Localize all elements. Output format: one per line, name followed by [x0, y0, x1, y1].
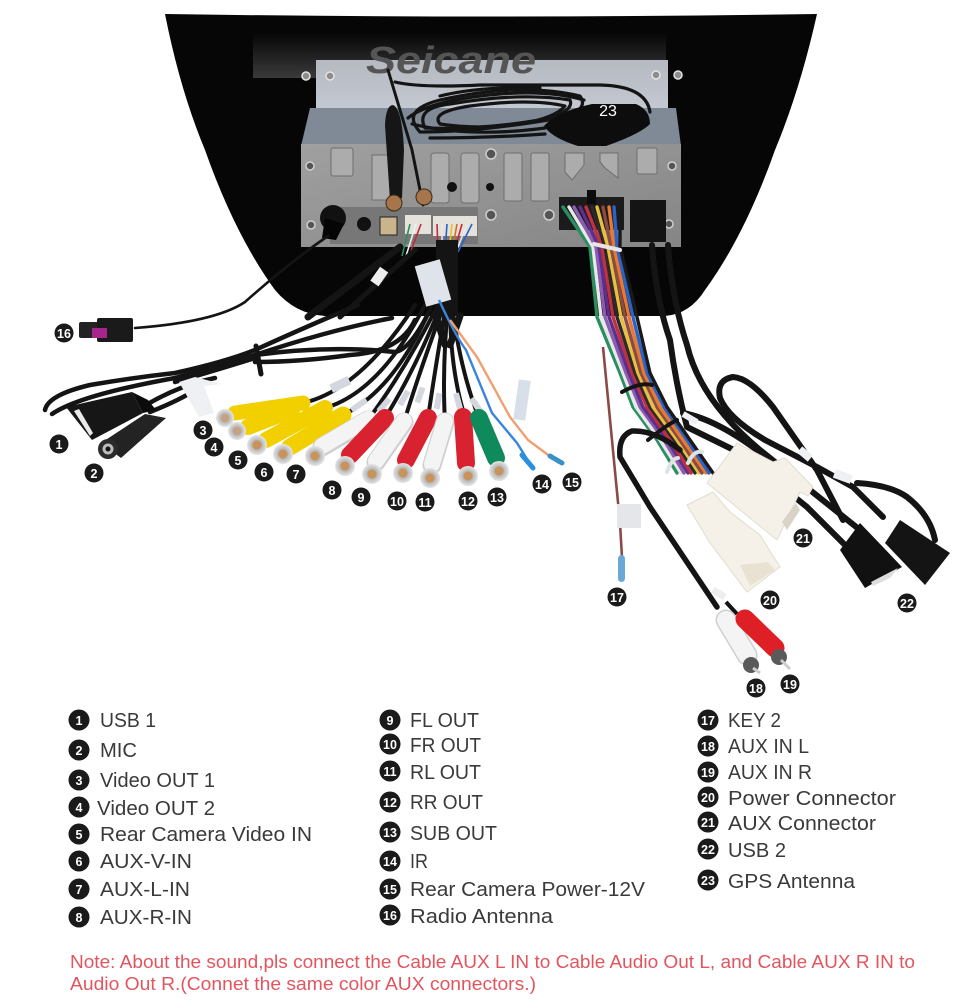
- marker 10: 10: [390, 495, 404, 509]
- RCA 13 green: [479, 418, 509, 481]
- marker 8: 8: [329, 484, 336, 498]
- item 7: AUX-L-IN: [100, 879, 190, 901]
- connector 16: [79, 318, 133, 342]
- key wire tag: [617, 504, 641, 528]
- item 12: 12: [383, 796, 397, 810]
- plug boot: [322, 218, 344, 240]
- upper metal plate: [316, 60, 668, 110]
- RCA 3 yellow: [216, 403, 303, 427]
- item 1: USB 1: [100, 710, 156, 732]
- item 16: 16: [383, 909, 397, 923]
- face screws: [306, 149, 676, 229]
- photo number markers: [50, 324, 916, 698]
- item 22: [698, 838, 786, 862]
- item 14: 14: [383, 855, 397, 869]
- marker 19: [780, 674, 800, 694]
- item 20: 20: [701, 791, 715, 805]
- item 2: 2: [76, 744, 83, 758]
- orange wire 15: [450, 320, 559, 463]
- connector 20 white: [687, 492, 780, 592]
- USB 2 right: [885, 520, 950, 585]
- item 16: Radio Antenna: [410, 906, 554, 928]
- item 15: 15: [383, 883, 397, 897]
- note text: Audio Out R.(Connet the same color AUX connectors.): [70, 974, 536, 994]
- marker 14: 14: [535, 478, 549, 492]
- tip 15: [550, 456, 562, 463]
- item 6: [68, 850, 192, 873]
- item 14: IR: [410, 851, 428, 873]
- item 9: 9: [387, 714, 394, 728]
- marker 12: [458, 492, 478, 510]
- connector 21 white: [707, 443, 813, 540]
- stub antenna: [385, 105, 404, 200]
- thick rear bundle: [308, 247, 400, 317]
- legend column 1: [68, 710, 312, 929]
- marker 14: [532, 474, 552, 494]
- marker 2: [84, 464, 104, 482]
- USB 1 socket: [66, 392, 156, 440]
- legend column 2: [380, 710, 646, 928]
- note text: [70, 952, 915, 994]
- item 4: Video OUT 2: [97, 798, 215, 820]
- item 4: 4: [76, 801, 83, 815]
- round pigtail plug: [320, 205, 346, 231]
- item 17: 17: [701, 714, 715, 728]
- marker 13: 13: [490, 491, 504, 505]
- marker 6: [254, 462, 274, 482]
- ISO small socket: [630, 200, 666, 242]
- RCA white tag: [415, 259, 451, 307]
- marker 7: 7: [293, 468, 300, 482]
- marker 18: 18: [749, 682, 763, 696]
- cables: left bundle: [45, 240, 479, 422]
- blue wire 14: [439, 300, 532, 467]
- antenna wire: [388, 70, 423, 205]
- marker 15: [562, 472, 582, 492]
- item 6: AUX-V-IN: [100, 851, 192, 873]
- dark band behind unit: [253, 33, 666, 78]
- item 12: RR OUT: [410, 792, 483, 814]
- RCA 4 yellow: [228, 410, 292, 440]
- item 2: [68, 740, 137, 762]
- item 10: 10: [383, 738, 397, 752]
- note text: Note: About the sound,pls connect the Cable AUX L IN to Cable Audio Out L, and Cable AUX R IN to: [70, 952, 915, 972]
- marker 1: [50, 434, 68, 454]
- key wire tip: [618, 555, 625, 582]
- marker 16: [54, 324, 74, 342]
- RCA 5 yellow: [247, 408, 325, 455]
- socket latch: [587, 190, 596, 204]
- plug 19: [745, 619, 790, 669]
- item 18: AUX IN L: [728, 736, 809, 758]
- marker 9: 9: [358, 491, 365, 505]
- item 17: KEY 2: [728, 710, 781, 732]
- cable label: [711, 587, 727, 600]
- harness cable ties: [594, 244, 702, 472]
- item 20: Power Connector: [728, 788, 896, 810]
- marker 3: 3: [200, 424, 207, 438]
- item 13: [380, 822, 497, 845]
- marker 12: 12: [461, 495, 475, 509]
- holes: [357, 182, 494, 231]
- second rear cable: [340, 250, 415, 317]
- AUX IN plugs 18-19: [711, 587, 790, 673]
- item 11: 11: [383, 765, 397, 779]
- black dash panel: [165, 14, 817, 316]
- marker 17: [608, 588, 626, 606]
- RCA 12 red: [458, 417, 478, 486]
- marker 18: [746, 678, 766, 698]
- AUX IN cable: [620, 431, 717, 607]
- item 7: 7: [76, 883, 83, 897]
- cable tie: [256, 346, 261, 374]
- marker 19: 19: [783, 678, 797, 692]
- antenna lead to connector 16: [135, 236, 328, 328]
- marker 5: 5: [235, 454, 242, 468]
- RCA 6 yellow: [273, 415, 343, 464]
- item 3: 3: [76, 774, 83, 788]
- plug 18: [726, 620, 760, 673]
- marker 4: [204, 438, 224, 456]
- marker 8: [322, 480, 342, 500]
- item 13: 13: [383, 826, 397, 840]
- marker 22: 22: [900, 597, 914, 611]
- marker 3: [194, 420, 212, 440]
- right cables behind harness: [652, 245, 935, 545]
- tip 14: [522, 455, 533, 468]
- item 9: FL OUT: [410, 710, 479, 732]
- item 9: [380, 710, 479, 732]
- item 22: USB 2: [728, 840, 786, 862]
- main harness socket: [559, 197, 624, 230]
- white cable tag left: [179, 377, 222, 417]
- marker 7: [286, 464, 306, 484]
- item 17: [698, 710, 781, 732]
- item 5: Rear Camera Video IN: [100, 824, 312, 846]
- item 23: 23: [701, 874, 715, 888]
- item 1: 1: [76, 714, 83, 728]
- item 8: 8: [76, 911, 83, 925]
- item 18: [698, 736, 809, 758]
- marker 15: 15: [565, 476, 579, 490]
- marker 21: [794, 528, 812, 548]
- marker 10: [388, 492, 406, 510]
- USB 2 port: [871, 568, 898, 586]
- marker 11: 11: [418, 496, 432, 510]
- marker 16: 16: [57, 327, 71, 341]
- marker 2: 2: [91, 467, 98, 481]
- RCA 10 red: [393, 418, 428, 483]
- key wire 17: [603, 347, 622, 558]
- item 1: [68, 710, 156, 732]
- item 7: [68, 878, 190, 901]
- item 8: AUX-R-IN: [100, 907, 192, 929]
- marker 1: 1: [56, 438, 63, 452]
- RCA 8 red: [335, 418, 385, 476]
- small connector wires: [402, 224, 472, 256]
- wire harness: [563, 207, 713, 473]
- marker 20: [760, 590, 780, 610]
- coiled GPS cable: [395, 82, 650, 138]
- chassis top: [301, 108, 681, 146]
- white cable clip: [370, 267, 388, 286]
- MIC jack 2: [98, 414, 166, 459]
- item 19: 19: [701, 766, 715, 780]
- lower connector strip: [330, 207, 478, 244]
- item 15: Rear Camera Power-12V: [410, 879, 646, 901]
- marker 21: 21: [796, 532, 810, 546]
- plate screws: [302, 71, 682, 80]
- wire tag: [513, 379, 531, 421]
- item 14: [380, 850, 428, 873]
- label 23: 23: [599, 103, 617, 120]
- marker 6: 6: [261, 466, 268, 480]
- item 23: GPS Antenna: [728, 871, 856, 893]
- small connectors: [380, 215, 477, 236]
- gold connectors: [386, 189, 432, 211]
- RCA cable tags: [329, 376, 483, 413]
- item 12: [380, 792, 483, 814]
- item 3: Video OUT 1: [100, 770, 215, 792]
- item 2: MIC: [100, 740, 137, 762]
- marker 9: [352, 488, 370, 506]
- rear face: [301, 144, 681, 247]
- item 22: 22: [701, 843, 715, 857]
- USB cable labels: [682, 411, 853, 484]
- RCA feed cables: [303, 305, 479, 422]
- RCA 7 white: [305, 419, 368, 466]
- RCA 9 white: [362, 421, 404, 484]
- USB 2 left: [840, 523, 902, 588]
- item 21: 21: [701, 816, 715, 830]
- item 19: AUX IN R: [728, 762, 812, 784]
- item 10: FR OUT: [410, 735, 481, 757]
- face recesses: [331, 148, 657, 203]
- item 6: 6: [76, 855, 83, 869]
- item 11: RL OUT: [410, 762, 481, 784]
- item 21: AUX Connector: [728, 813, 876, 835]
- RCA plugs 3-13: [216, 403, 509, 488]
- item 18: 18: [701, 740, 715, 754]
- item 5: 5: [76, 828, 83, 842]
- watermark: Seicane: [366, 40, 536, 82]
- RCA trunk: [436, 240, 458, 316]
- item 10: [380, 734, 481, 757]
- feed to red: [726, 602, 737, 614]
- marker 13: [488, 488, 506, 506]
- marker 20: 20: [763, 594, 777, 608]
- marker 22: [898, 594, 916, 612]
- marker 17: 17: [610, 591, 624, 605]
- marker 4: 4: [211, 441, 218, 455]
- item 13: SUB OUT: [410, 823, 497, 845]
- photo: head unit rear: [165, 14, 817, 316]
- marker 11: [416, 492, 434, 512]
- legend column 3: [698, 710, 896, 893]
- GPS antenna puck: [544, 104, 650, 146]
- marker 5: [228, 450, 248, 470]
- item 11: [380, 760, 481, 784]
- RCA 11 white: [420, 421, 445, 488]
